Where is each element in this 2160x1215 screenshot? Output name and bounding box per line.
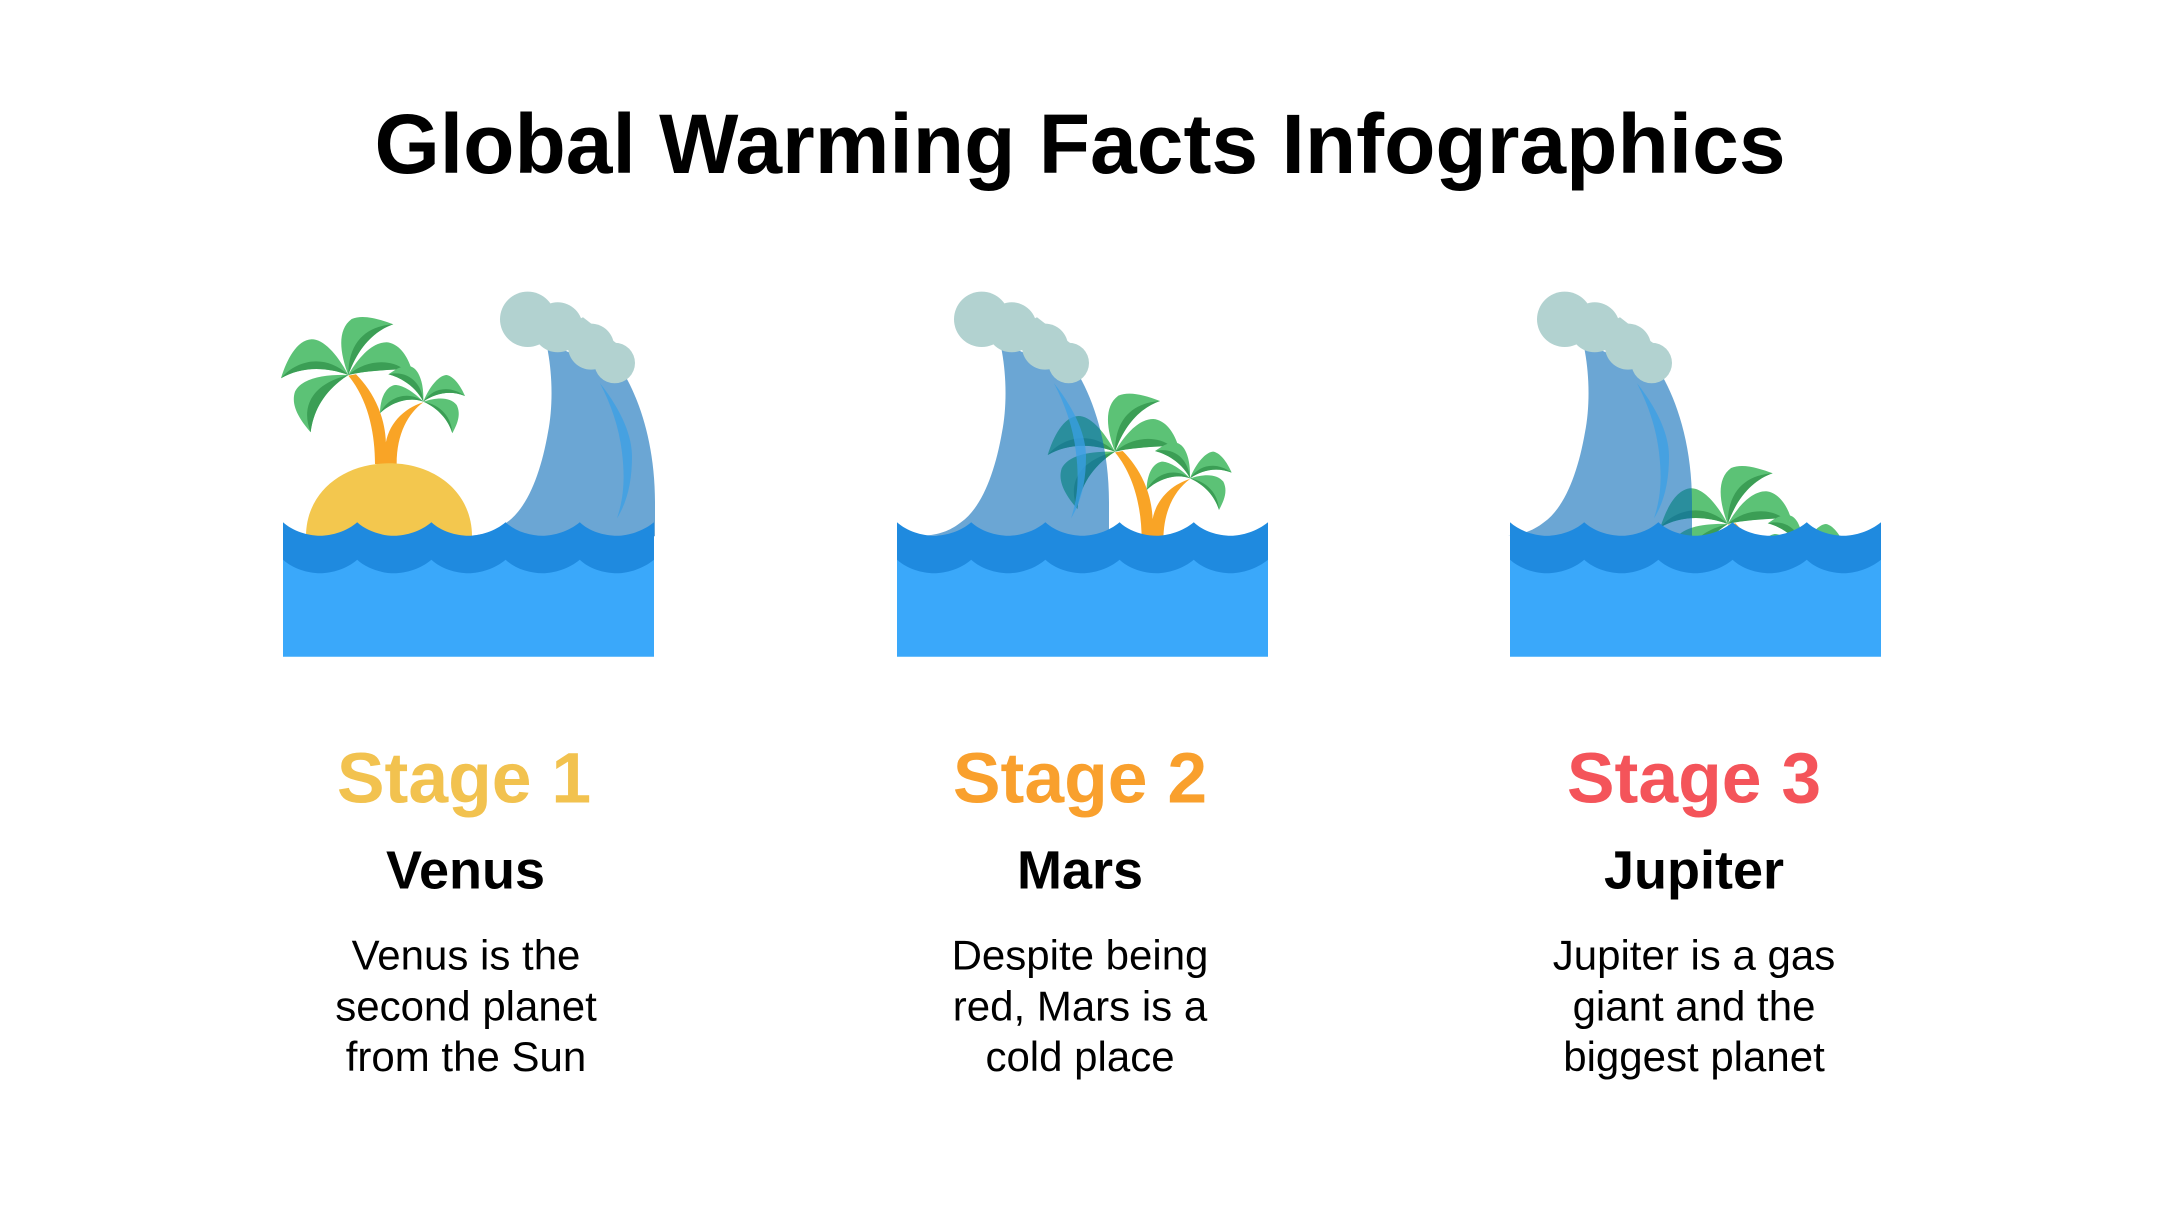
text block: Mars description: cold place [985, 1033, 1175, 1080]
heading: stage 1: Stage 1 [337, 738, 591, 818]
icon: sand island [306, 463, 472, 536]
text block: Venus description: second planet [335, 982, 597, 1030]
planet name: Jupiter: Jupiter [1604, 840, 1784, 900]
text block: Jupiter description: Jupiter is a gas [1553, 932, 1835, 978]
title: Global Warming Facts Infographics [374, 97, 1786, 191]
text block: Mars description: Despite being [952, 932, 1208, 978]
illustration: palm trees nearly submerged beside wave [1508, 292, 1881, 657]
icon: tidal wave [471, 292, 655, 536]
panel: stage 2 [897, 292, 1268, 1080]
text block: Venus description [335, 932, 597, 1080]
heading: stage 3: Stage 3 [1567, 738, 1821, 818]
heading: stage 2: Stage 2 [953, 738, 1207, 818]
panel: stage 1 [281, 292, 655, 1080]
planet name: Mars: Mars [1017, 840, 1143, 900]
icon: sea water [897, 522, 1268, 657]
text block: Mars description: red, Mars is a [953, 982, 1208, 1030]
illustration: wave reaching the palm trees [897, 292, 1268, 657]
icon: palm trees [1048, 394, 1232, 541]
text block: Venus description: from the Sun [346, 1033, 586, 1080]
icon: tidal wave [925, 292, 1109, 536]
text block: Jupiter description [1553, 932, 1835, 1080]
text block: Jupiter description: giant and the [1573, 982, 1815, 1030]
illustration: island with palm trees and approaching wave [281, 292, 655, 657]
icon: submerged palm trees [1660, 466, 1844, 613]
text block: Jupiter description: biggest planet [1563, 1033, 1825, 1080]
panel: stage 3 [1508, 292, 1881, 1080]
icon: tidal wave [1508, 292, 1692, 536]
icon: sea water [1510, 522, 1881, 657]
text block: Venus description: Venus is the [352, 932, 580, 978]
icon: sea water [283, 522, 654, 657]
text block: Mars description [952, 932, 1208, 1080]
planet name: Venus: Venus [386, 840, 545, 900]
icon: palm trees [281, 317, 465, 464]
